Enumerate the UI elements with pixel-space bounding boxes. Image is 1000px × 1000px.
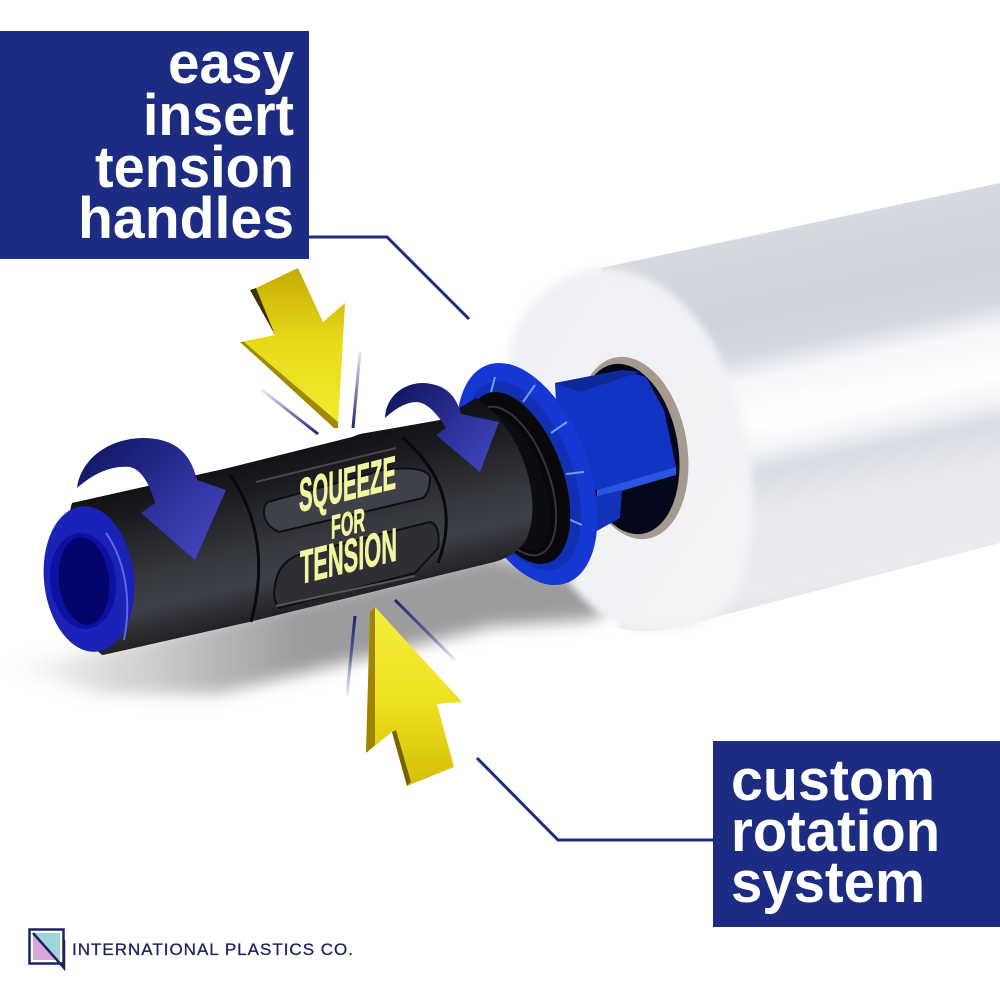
blue end cap <box>37 502 141 656</box>
heading text: tension <box>95 135 294 200</box>
heading text <box>78 31 294 251</box>
logo: International Plastics Co.: INTERNATIONAL PLASTICS CO. <box>72 940 353 959</box>
cardboard core <box>562 348 702 548</box>
motion lines <box>262 352 455 695</box>
drop shadow below handle and roll <box>10 555 640 694</box>
heading text: easy <box>168 31 294 96</box>
arrow: right rotation <box>385 383 499 472</box>
tension handle <box>37 378 591 656</box>
panel: easy insert tension handles <box>0 31 309 259</box>
heading text: custom <box>731 748 935 813</box>
panel: custom rotation system <box>713 741 1000 927</box>
tension handle: SQUEEZE <box>299 447 396 523</box>
icon: logo square <box>30 930 64 968</box>
highlight streak on film <box>762 366 1000 440</box>
blue inner spindle <box>555 370 676 532</box>
heading text: insert <box>143 83 294 148</box>
roll front face <box>509 268 753 631</box>
handle barrel <box>69 398 532 655</box>
arrow: bottom squeeze <box>366 607 462 786</box>
blue flange <box>429 344 625 604</box>
arrow: left rotation <box>77 438 226 560</box>
logo: International Plastics Co. <box>30 930 353 968</box>
leader line: bottom callout <box>477 758 713 840</box>
heading text: rotation <box>731 799 940 864</box>
roll body <box>600 183 1000 631</box>
leader line: top callout <box>309 237 469 319</box>
handle label: FOR <box>331 502 365 547</box>
heading text: system <box>731 850 925 915</box>
heading text <box>731 748 940 915</box>
stretch film roll <box>509 183 1000 631</box>
handle label <box>299 447 397 595</box>
grip seams <box>230 437 446 622</box>
handle collar <box>445 378 591 578</box>
tension handle: TENSION <box>300 519 397 595</box>
arrow: top squeeze <box>240 268 345 428</box>
grip panels <box>264 469 430 532</box>
heading text: handles <box>78 186 294 251</box>
